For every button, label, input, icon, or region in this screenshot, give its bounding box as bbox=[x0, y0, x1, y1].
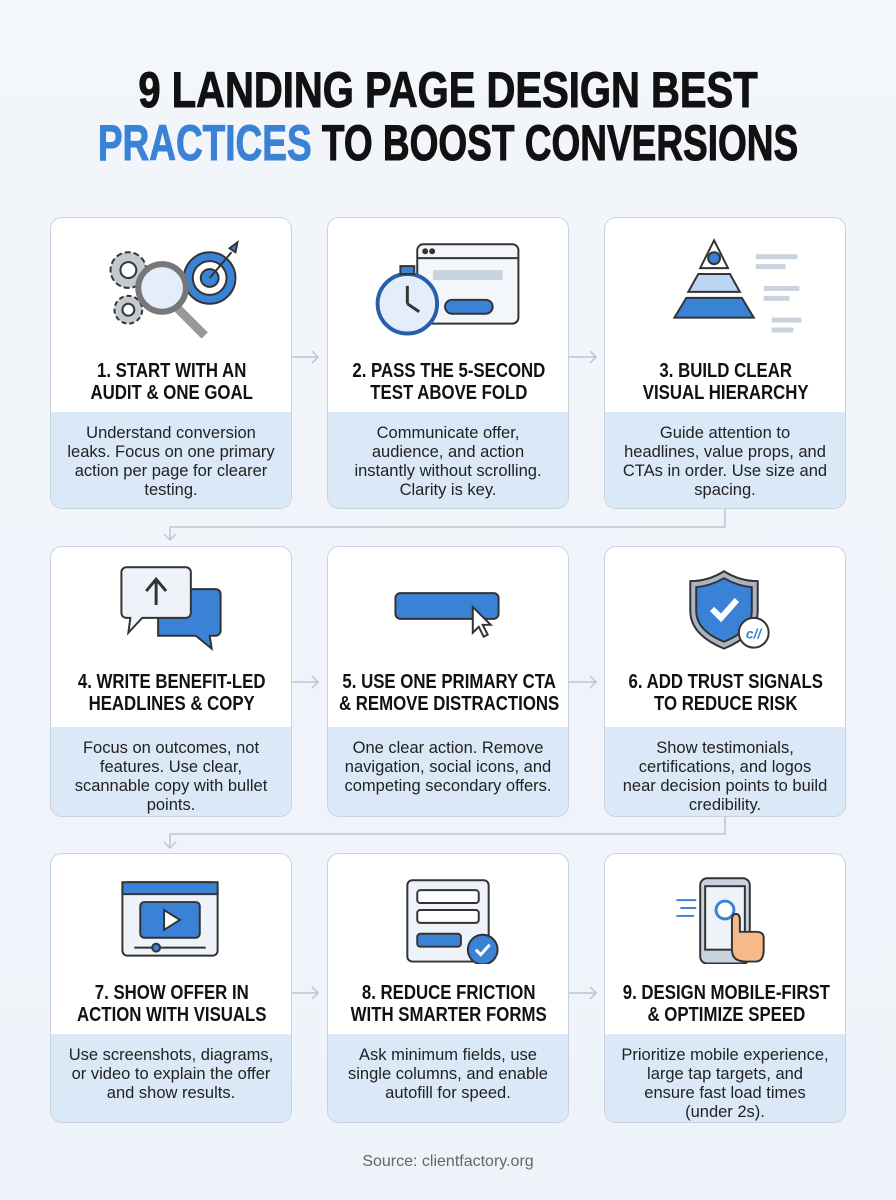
card 6 bbox=[604, 546, 846, 817]
heading bbox=[629, 671, 823, 715]
text bbox=[328, 1034, 568, 1122]
icon: video player bbox=[121, 881, 219, 957]
heading: HEADLINES & COPY bbox=[89, 693, 255, 715]
heading bbox=[622, 982, 830, 1026]
card 4 bbox=[50, 546, 292, 817]
heading: VISUAL HIERARCHY bbox=[643, 382, 809, 404]
card 2 bbox=[327, 217, 569, 509]
heading: 1. START WITH AN bbox=[97, 360, 247, 382]
title bbox=[98, 62, 798, 171]
text bbox=[51, 727, 291, 816]
text: Communicate offer, audience, and action instantly without scrolling. Clarity is key. bbox=[354, 424, 542, 499]
heading: AUDIT & ONE GOAL bbox=[91, 382, 253, 404]
text: Guide attention to headlines, value props, and CTAs in order. Use size and spacing. bbox=[623, 424, 827, 499]
source: Source: clientfactory.org bbox=[362, 1153, 534, 1170]
card 9 bbox=[604, 853, 846, 1123]
text bbox=[51, 412, 291, 508]
heading: 6. ADD TRUST SIGNALS bbox=[629, 671, 823, 693]
heading: & OPTIMIZE SPEED bbox=[647, 1004, 805, 1026]
text: Understand conversion leaks. Focus on one primary action per page for clearer testing. bbox=[67, 424, 275, 499]
text: Show testimonials, certifications, and logos near decision points to build credibility. bbox=[623, 739, 827, 814]
text: Use screenshots, diagrams, or video to explain the offer and show results. bbox=[69, 1046, 273, 1102]
heading: 8. REDUCE FRICTION bbox=[362, 982, 536, 1004]
heading: WITH SMARTER FORMS bbox=[351, 1004, 547, 1026]
heading: & REMOVE DISTRACTIONS bbox=[339, 693, 559, 715]
heading: 2. PASS THE 5-SECOND bbox=[353, 360, 545, 382]
heading: ACTION WITH VISUALS bbox=[77, 1004, 267, 1026]
text: Ask minimum fields, use single columns, and enable autofill for speed. bbox=[348, 1046, 548, 1102]
icon: chat bubbles bbox=[120, 566, 222, 651]
icon: pyramid with eye bbox=[672, 238, 802, 332]
heading bbox=[90, 360, 253, 404]
heading: 4. WRITE BENEFIT-LED bbox=[78, 671, 266, 693]
heading bbox=[339, 671, 559, 715]
heading: 3. BUILD CLEAR bbox=[660, 360, 792, 382]
icon: gears magnifier target bbox=[110, 240, 239, 338]
card 3 bbox=[604, 217, 846, 509]
title: 9 LANDING PAGE DESIGN BEST bbox=[138, 62, 758, 118]
heading: TO REDUCE RISK bbox=[654, 693, 798, 715]
icon: phone with tap bbox=[676, 877, 765, 964]
text: Prioritize mobile experience, large tap targets, and ensure fast load times (under 2s). bbox=[621, 1046, 829, 1121]
text bbox=[328, 412, 568, 508]
text: One clear action. Remove navigation, social icons, and competing secondary offers. bbox=[344, 739, 551, 795]
heading: 9. DESIGN MOBILE-FIRST bbox=[622, 982, 830, 1004]
text bbox=[328, 727, 568, 816]
card 8 bbox=[327, 853, 569, 1123]
heading: TEST ABOVE FOLD bbox=[370, 382, 528, 404]
heading bbox=[642, 360, 809, 404]
heading bbox=[350, 982, 547, 1026]
icon: stopwatch and browser bbox=[376, 243, 520, 336]
heading bbox=[352, 360, 545, 404]
card 7 bbox=[50, 853, 292, 1123]
icon: button with cursor bbox=[394, 592, 500, 638]
text bbox=[605, 412, 845, 508]
text: Focus on outcomes, not features. Use clear, scannable copy with bullet points. bbox=[75, 739, 267, 814]
icon: shield with badge bbox=[689, 570, 770, 650]
heading bbox=[77, 982, 267, 1026]
card 1 bbox=[50, 217, 292, 509]
icon: shield with badge: c// bbox=[746, 626, 763, 642]
title: PRACTICES TO BOOST CONVERSIONS bbox=[98, 115, 798, 171]
heading: 7. SHOW OFFER IN bbox=[95, 982, 249, 1004]
heading: 5. USE ONE PRIMARY CTA bbox=[342, 671, 556, 693]
text bbox=[51, 1034, 291, 1122]
icon: form bbox=[406, 879, 499, 964]
card 5 bbox=[327, 546, 569, 817]
heading bbox=[78, 671, 266, 715]
